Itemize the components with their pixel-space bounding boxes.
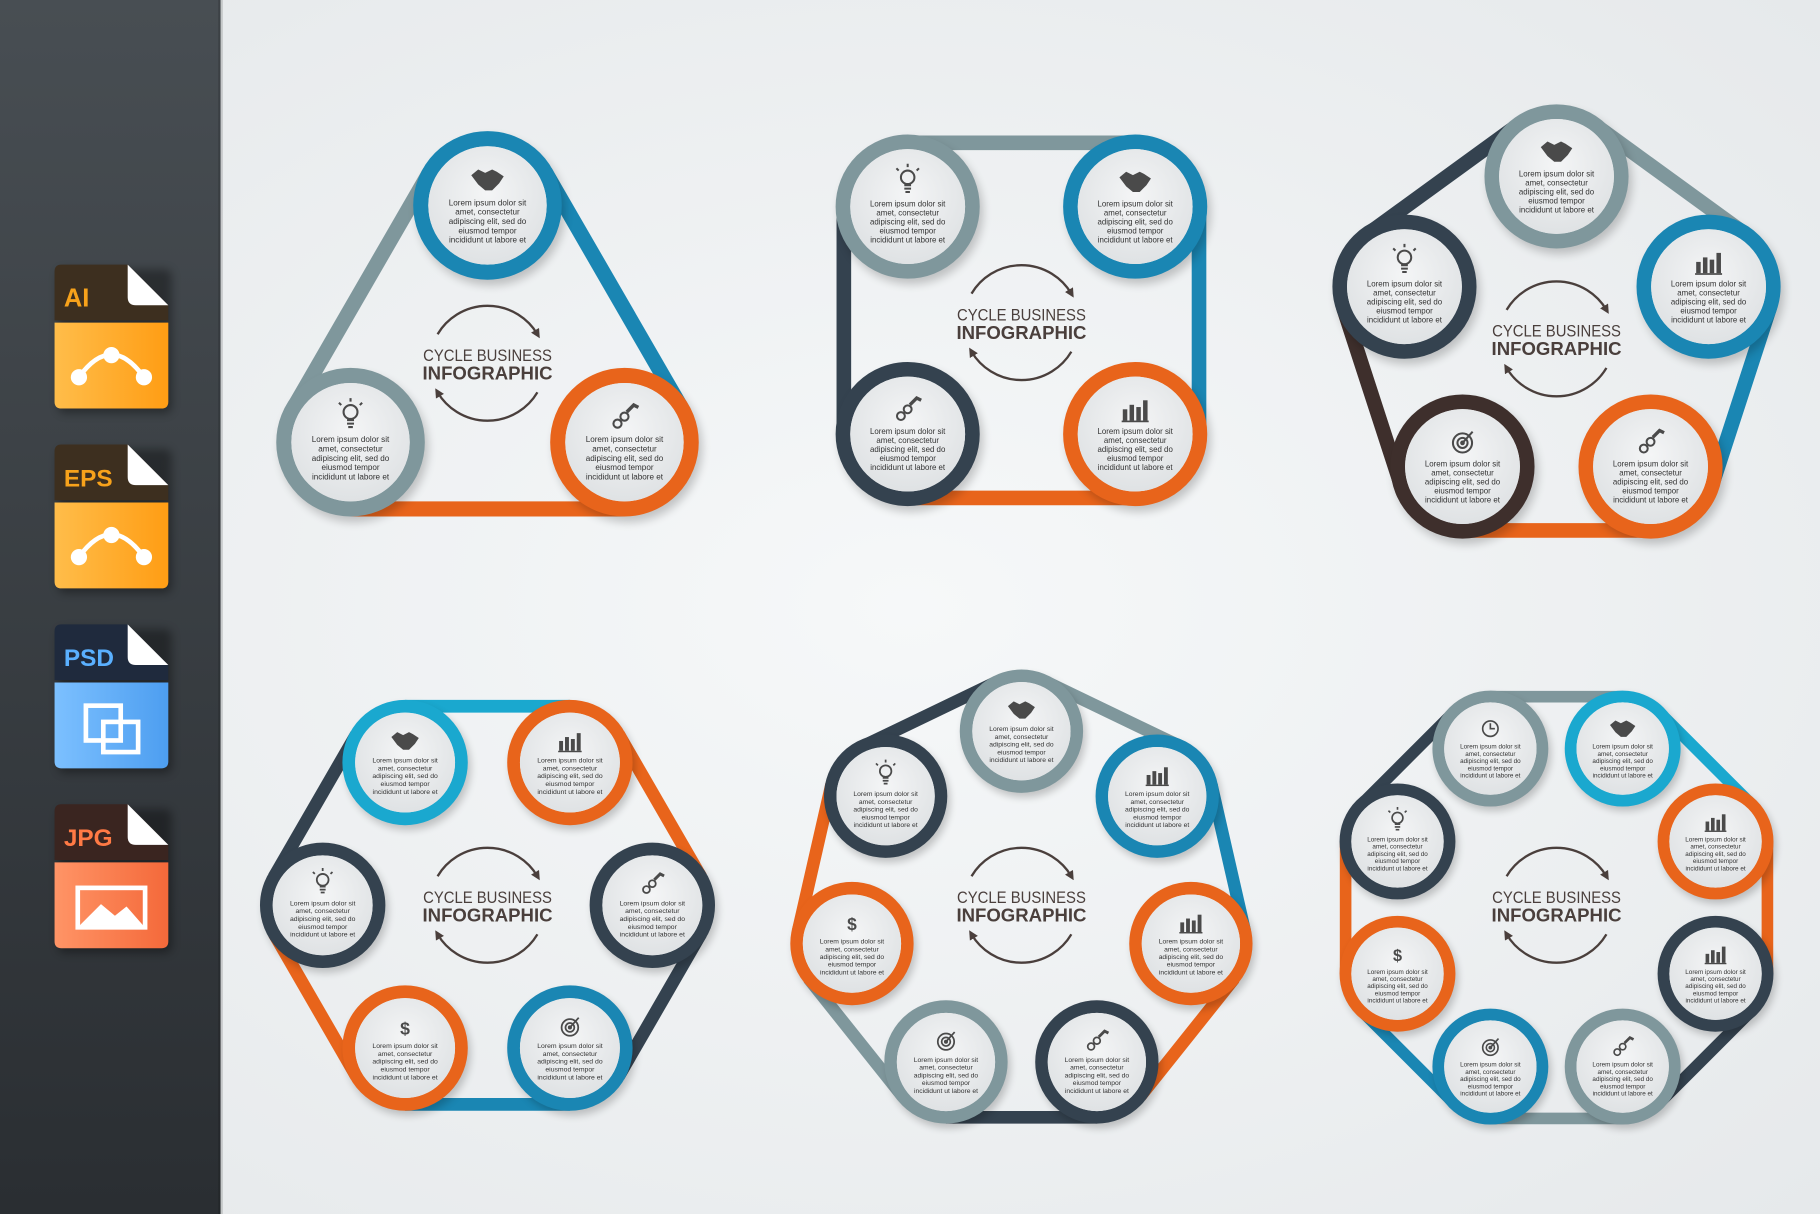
- diagram 3: pentagon: [1336, 110, 1784, 544]
- circle: bottom-right orange: amet, consectetur: [1619, 469, 1682, 478]
- circle: top-right blue: amet, consectetur: [1104, 209, 1167, 218]
- circle: left-lower orange: [1342, 920, 1458, 1036]
- ribbons: octagon: [1346, 697, 1767, 1118]
- circle: bottom-left orange: adipiscing elit, sed do: [372, 1059, 438, 1066]
- circle: upper-right blue: eiusmod tempor: [1133, 814, 1182, 821]
- circle: top blue: Lorem ipsum dolor sit: [449, 198, 527, 207]
- circle: top-right orange: [510, 705, 636, 830]
- circle: bottom-right orange: incididunt ut labore et: [1613, 496, 1689, 505]
- circle: right orange: incididunt ut labore et: [1159, 969, 1223, 976]
- circle: left slate: incididunt ut labore et: [1367, 316, 1443, 325]
- circle: bottom-right orange: eiusmod tempor: [1107, 454, 1164, 463]
- circle: left slate: amet, consectetur: [1373, 289, 1436, 298]
- circle: right orange: amet, consectetur: [1164, 946, 1218, 953]
- circle: right-upper orange: amet, consectetur: [1690, 844, 1741, 851]
- circle: upper-right blue: adipiscing elit, sed do: [1125, 807, 1190, 814]
- circle: bottom-right orange: [1582, 400, 1726, 544]
- circle: top-right blue: incididunt ut labore et: [1098, 236, 1173, 245]
- circle: left orange: adipiscing elit, sed do: [820, 954, 884, 961]
- circle: bottom-right blue: amet, consectetur: [543, 1051, 598, 1058]
- circle: bottom-left orange: amet, consectetur: [378, 1051, 433, 1058]
- center label: hexagon: CYCLE BUSINESS: [423, 889, 552, 907]
- circle: left-upper dark: eiusmod tempor: [1375, 858, 1420, 865]
- circle: bottom-left blue: eiusmod tempor: [1468, 1083, 1513, 1090]
- circle: top gray: incididunt ut labore et: [989, 757, 1054, 764]
- circle: top-right orange: eiusmod tempor: [545, 781, 595, 788]
- circle: left gray: [280, 374, 428, 522]
- circle: bottom-right dark: adipiscing elit, sed do: [1065, 1072, 1129, 1079]
- circle: top gray: amet, consectetur: [995, 734, 1049, 741]
- center label: triangle: INFOGRAPHIC: [423, 363, 552, 384]
- circle: left-lower orange: adipiscing elit, sed do: [1367, 983, 1428, 990]
- diagram 5: heptagon: [793, 674, 1255, 1128]
- circle: upper-right blue: amet, consectetur: [1130, 799, 1185, 806]
- circle: bottom-left gray: adipiscing elit, sed do: [914, 1072, 978, 1079]
- circle: top gray: [963, 674, 1086, 798]
- circle: left-lower orange: eiusmod tempor: [1375, 990, 1420, 997]
- circle: bottom-left orange: eiusmod tempor: [381, 1067, 430, 1074]
- center label: heptagon: CYCLE BUSINESS: [957, 889, 1086, 907]
- circle: top-right cyan: amet, consectetur: [1598, 751, 1648, 758]
- circle: top-right cyan: incididunt ut labore et: [1593, 773, 1653, 780]
- icon: EPS file: [55, 445, 172, 593]
- circle: right orange: Lorem ipsum dolor sit: [1159, 939, 1223, 946]
- circle: bottom-left blue: incididunt ut labore et: [1460, 1091, 1521, 1098]
- circle: left dark: [263, 847, 388, 973]
- circle: top gray: incididunt ut labore et: [1519, 205, 1595, 214]
- circle: left gray: amet, consectetur: [318, 444, 383, 453]
- center label: square: INFOGRAPHIC: [956, 322, 1086, 343]
- circle: top gray: Lorem ipsum dolor sit: [989, 726, 1054, 733]
- circle: right orange: amet, consectetur: [592, 444, 657, 453]
- circle: top-left gray: incididunt ut labore et: [1460, 773, 1521, 780]
- circle: top-left gray: Lorem ipsum dolor sit: [1460, 744, 1521, 751]
- circle: left slate: eiusmod tempor: [1376, 307, 1433, 316]
- circle: right dark: amet, consectetur: [625, 908, 680, 915]
- circle: top-right orange: amet, consectetur: [543, 765, 598, 772]
- circle: top-right cyan: adipiscing elit, sed do: [1592, 758, 1653, 765]
- circle: top-left gray: [839, 140, 983, 284]
- circle: upper-right blue: Lorem ipsum dolor sit: [1125, 791, 1190, 798]
- sidebar: [0, 0, 223, 1214]
- circle: right dark: adipiscing elit, sed do: [620, 916, 685, 923]
- center label: pentagon: CYCLE BUSINESS: [1492, 323, 1621, 341]
- circle: top-left gray: amet, consectetur: [1465, 751, 1516, 758]
- circle: right dark: [593, 847, 718, 973]
- circle: top-right blue: Lorem ipsum dolor sit: [1098, 200, 1174, 209]
- circle: top blue: [417, 137, 565, 286]
- circle: upper-left dark: eiusmod tempor: [861, 814, 911, 821]
- circle: bottom-right orange: incididunt ut labore et: [1098, 463, 1173, 472]
- circle: left slate: [1336, 220, 1480, 364]
- circle: top-right cyan: [1567, 695, 1683, 811]
- circle: top-right blue: [1066, 140, 1211, 284]
- circle: bottom-right gray: eiusmod tempor: [1600, 1083, 1645, 1090]
- circle: bottom-right gray: adipiscing elit, sed do: [1592, 1076, 1653, 1083]
- circle: right-lower dark: amet, consectetur: [1690, 976, 1741, 983]
- circle: top gray: eiusmod tempor: [1528, 196, 1585, 205]
- circle: left dark: amet, consectetur: [295, 908, 351, 915]
- circle: upper-right blue: [1098, 739, 1222, 863]
- icon: JPG file: [55, 804, 172, 953]
- circle: upper-right blue: incididunt ut labore et: [1125, 822, 1189, 829]
- circle: upper-left dark: incididunt ut labore et: [854, 822, 918, 829]
- circle: left dark: adipiscing elit, sed do: [290, 916, 356, 923]
- circle: right orange: Lorem ipsum dolor sit: [586, 435, 664, 444]
- circle: bottom-right dark: eiusmod tempor: [1073, 1080, 1122, 1087]
- circle: right orange: adipiscing elit, sed do: [1159, 954, 1223, 961]
- circle: left gray: adipiscing elit, sed do: [312, 454, 390, 463]
- circle: top-left cyan: [345, 705, 471, 830]
- circle: right blue: incididunt ut labore et: [1671, 316, 1747, 325]
- circle: right-upper orange: adipiscing elit, sed do: [1685, 851, 1746, 858]
- circle: right-upper orange: eiusmod tempor: [1693, 858, 1738, 865]
- center label: octagon: [1492, 848, 1622, 963]
- circle: bottom-left brown: eiusmod tempor: [1434, 487, 1491, 496]
- circle: left orange: amet, consectetur: [825, 946, 879, 953]
- icon: PSD file: PSD: [64, 645, 114, 672]
- circle: top gray: Lorem ipsum dolor sit: [1519, 169, 1595, 178]
- circle: left-upper dark: amet, consectetur: [1372, 844, 1423, 851]
- circle: bottom-left gray: incididunt ut labore et: [914, 1088, 978, 1095]
- ribbons: hexagon: [274, 706, 701, 1104]
- circle: top-left gray: amet, consectetur: [876, 209, 939, 218]
- circle: upper-left dark: [827, 739, 950, 863]
- circle: bottom-left brown: Lorem ipsum dolor sit: [1425, 460, 1501, 469]
- icon: AI file: [55, 265, 172, 413]
- circle: bottom-right blue: eiusmod tempor: [545, 1067, 595, 1074]
- circle: left-upper dark: Lorem ipsum dolor sit: [1367, 836, 1428, 843]
- circle: right orange: adipiscing elit, sed do: [586, 454, 664, 463]
- circle: upper-left dark: amet, consectetur: [859, 799, 913, 806]
- icon: AI file: AI: [64, 284, 89, 312]
- circle: top-right blue: adipiscing elit, sed do: [1098, 218, 1173, 227]
- circle: top-left gray: eiusmod tempor: [1468, 765, 1513, 772]
- circle: top-right orange: incididunt ut labore et: [537, 789, 603, 796]
- circle: left-lower orange: $: [1393, 947, 1402, 965]
- circle: right dark: eiusmod tempor: [628, 924, 678, 931]
- diagram 1: triangle: [280, 137, 702, 522]
- circle: bottom-right dark: [1038, 1005, 1161, 1128]
- circle: right-upper orange: [1660, 788, 1776, 904]
- circle: bottom-left dark: adipiscing elit, sed do: [870, 445, 946, 454]
- circle: right-lower dark: adipiscing elit, sed do: [1685, 983, 1746, 990]
- circle: right orange: eiusmod tempor: [1167, 962, 1216, 969]
- circle: left orange: $: [847, 914, 857, 934]
- circle: right orange: [1132, 887, 1255, 1010]
- circle: left gray: eiusmod tempor: [321, 463, 380, 472]
- circle: bottom-left dark: incididunt ut labore et: [870, 463, 946, 472]
- circle: left orange: Lorem ipsum dolor sit: [820, 939, 884, 946]
- circle: right dark: Lorem ipsum dolor sit: [620, 900, 685, 907]
- circle: left-upper dark: incididunt ut labore et: [1367, 865, 1428, 872]
- circle: bottom-right blue: adipiscing elit, sed do: [537, 1059, 603, 1066]
- circle: bottom-left blue: adipiscing elit, sed do: [1460, 1076, 1521, 1083]
- circle: top-left cyan: amet, consectetur: [378, 765, 433, 772]
- circle: top-left cyan: eiusmod tempor: [381, 781, 430, 788]
- circle: top-left gray: incididunt ut labore et: [870, 236, 946, 245]
- circle: top-left cyan: adipiscing elit, sed do: [372, 773, 438, 780]
- circle: bottom-right gray: amet, consectetur: [1598, 1069, 1648, 1076]
- circle: top blue: incididunt ut labore et: [449, 236, 527, 245]
- circle: bottom-left gray: Lorem ipsum dolor sit: [914, 1057, 978, 1064]
- diagram 4: hexagon: [263, 705, 718, 1116]
- circle: bottom-left blue: [1435, 1013, 1551, 1129]
- circle: bottom-right orange: [1066, 368, 1211, 512]
- circle: right blue: Lorem ipsum dolor sit: [1671, 280, 1747, 289]
- center label: heptagon: INFOGRAPHIC: [956, 905, 1086, 926]
- circle: left orange: eiusmod tempor: [828, 962, 877, 969]
- center label: hexagon: INFOGRAPHIC: [423, 905, 552, 926]
- circle: top blue: adipiscing elit, sed do: [449, 217, 527, 226]
- diagram 2: square: [839, 140, 1211, 512]
- circle: bottom-left orange: $: [400, 1018, 410, 1038]
- circle: bottom-right blue: incididunt ut labore et: [537, 1074, 603, 1081]
- circle: bottom-right orange: adipiscing elit, sed do: [1613, 478, 1689, 487]
- circle: bottom-left dark: eiusmod tempor: [879, 454, 936, 463]
- center label: square: [956, 265, 1086, 380]
- circle: left orange: [793, 887, 917, 1010]
- center label: pentagon: [1492, 281, 1622, 396]
- circle: right-lower dark: Lorem ipsum dolor sit: [1685, 969, 1746, 976]
- center label: triangle: CYCLE BUSINESS: [423, 347, 552, 365]
- circle: left slate: Lorem ipsum dolor sit: [1367, 280, 1443, 289]
- circle: top gray: amet, consectetur: [1525, 178, 1588, 187]
- circle: bottom-right gray: incididunt ut labore et: [1593, 1091, 1653, 1098]
- circle: left dark: incididunt ut labore et: [290, 932, 355, 939]
- circle: bottom-right gray: [1567, 1013, 1683, 1129]
- circle: bottom-right blue: [510, 990, 636, 1116]
- circle: left-upper dark: [1342, 788, 1458, 904]
- circle: right blue: eiusmod tempor: [1680, 307, 1737, 316]
- circle: left-lower orange: incididunt ut labore et: [1367, 998, 1428, 1005]
- circle: bottom-right dark: incididunt ut labore et: [1065, 1088, 1129, 1095]
- icon: PSD file: [55, 624, 172, 773]
- circle: bottom-left brown: amet, consectetur: [1431, 469, 1494, 478]
- circle: top-left gray: eiusmod tempor: [879, 227, 936, 236]
- center label: pentagon: INFOGRAPHIC: [1492, 338, 1622, 359]
- circle: bottom-left dark: [839, 368, 983, 512]
- circle: bottom-right orange: eiusmod tempor: [1622, 487, 1679, 496]
- circle: bottom-left orange: incididunt ut labore et: [373, 1074, 438, 1081]
- circle: bottom-left orange: [345, 990, 471, 1116]
- circle: upper-left dark: adipiscing elit, sed do: [853, 807, 918, 814]
- circle: top-right cyan: Lorem ipsum dolor sit: [1592, 744, 1653, 751]
- circle: top-left gray: adipiscing elit, sed do: [870, 218, 946, 227]
- center label: hexagon: [422, 848, 552, 963]
- circle: top gray: adipiscing elit, sed do: [989, 742, 1054, 749]
- ribbons: heptagon: [798, 681, 1245, 1117]
- circle: right blue: adipiscing elit, sed do: [1671, 298, 1747, 307]
- circle: left-upper dark: adipiscing elit, sed do: [1367, 851, 1428, 858]
- center label: heptagon: [956, 848, 1086, 963]
- circle: bottom-left gray: [887, 1005, 1011, 1128]
- circle: bottom-right orange: Lorem ipsum dolor sit: [1613, 460, 1689, 469]
- circle: bottom-left brown: adipiscing elit, sed do: [1425, 478, 1501, 487]
- circle: bottom-left gray: eiusmod tempor: [922, 1080, 971, 1087]
- circle: top-right cyan: eiusmod tempor: [1600, 765, 1645, 772]
- circle: right blue: [1640, 220, 1784, 364]
- circle: top-left gray: Lorem ipsum dolor sit: [870, 200, 946, 209]
- circle: top blue: amet, consectetur: [455, 208, 520, 217]
- circle: right-lower dark: [1660, 920, 1776, 1036]
- circle: right orange: [554, 374, 702, 522]
- circle: right orange: eiusmod tempor: [595, 463, 654, 472]
- circle: bottom-left blue: amet, consectetur: [1465, 1069, 1516, 1076]
- circle: bottom-right gray: Lorem ipsum dolor sit: [1592, 1062, 1653, 1069]
- circle: bottom-right blue: Lorem ipsum dolor sit: [537, 1043, 603, 1050]
- ribbons: pentagon: [1343, 125, 1770, 530]
- circle: bottom-right orange: amet, consectetur: [1104, 436, 1167, 445]
- circle: right orange: incididunt ut labore et: [586, 472, 664, 481]
- circle: left dark: Lorem ipsum dolor sit: [290, 900, 355, 907]
- circle: right-upper orange: incididunt ut labore et: [1685, 865, 1746, 872]
- circle: left-lower orange: Lorem ipsum dolor sit: [1367, 969, 1428, 976]
- center label: octagon: CYCLE BUSINESS: [1492, 889, 1621, 907]
- circle: top gray: [1488, 110, 1632, 254]
- circle: top gray: adipiscing elit, sed do: [1519, 187, 1595, 196]
- circle: bottom-left dark: Lorem ipsum dolor sit: [870, 427, 946, 436]
- icon: JPG file: JPG: [64, 825, 113, 852]
- circle: right blue: amet, consectetur: [1677, 289, 1740, 298]
- circle: top-left cyan: incididunt ut labore et: [373, 789, 438, 796]
- circle: top blue: eiusmod tempor: [458, 226, 517, 235]
- circle: left gray: incididunt ut labore et: [312, 472, 390, 481]
- icon: EPS file: EPS: [64, 465, 113, 492]
- circle: top-right orange: adipiscing elit, sed do: [537, 773, 603, 780]
- circle: upper-left dark: Lorem ipsum dolor sit: [853, 791, 918, 798]
- circle: top gray: eiusmod tempor: [997, 749, 1046, 756]
- circle: bottom-left dark: amet, consectetur: [876, 436, 939, 445]
- circle: left gray: Lorem ipsum dolor sit: [312, 435, 390, 444]
- circle: right-upper orange: Lorem ipsum dolor sit: [1685, 836, 1746, 843]
- circle: bottom-left brown: incididunt ut labore et: [1425, 496, 1501, 505]
- ribbons: triangle: [293, 172, 682, 509]
- center label: triangle: [422, 306, 552, 421]
- circle: bottom-right orange: Lorem ipsum dolor sit: [1098, 427, 1174, 436]
- circle: top-left gray: [1435, 695, 1551, 811]
- circle: left dark: eiusmod tempor: [298, 924, 348, 931]
- diagram 6: octagon: [1342, 695, 1776, 1129]
- circle: top-left cyan: Lorem ipsum dolor sit: [372, 758, 438, 765]
- center label: octagon: INFOGRAPHIC: [1492, 905, 1622, 926]
- circle: right-lower dark: incididunt ut labore et: [1685, 998, 1746, 1005]
- circle: bottom-right dark: amet, consectetur: [1070, 1065, 1124, 1072]
- circle: bottom-left brown: [1394, 400, 1538, 544]
- circle: left-lower orange: amet, consectetur: [1372, 976, 1423, 983]
- circle: top-right blue: eiusmod tempor: [1107, 227, 1164, 236]
- circle: top-right orange: Lorem ipsum dolor sit: [537, 758, 603, 765]
- circle: right-lower dark: eiusmod tempor: [1693, 990, 1738, 997]
- circle: bottom-right orange: adipiscing elit, sed do: [1098, 445, 1173, 454]
- circle: bottom-left orange: Lorem ipsum dolor sit: [372, 1043, 438, 1050]
- center label: square: CYCLE BUSINESS: [957, 306, 1086, 324]
- circle: left slate: adipiscing elit, sed do: [1367, 298, 1443, 307]
- circle: right dark: incididunt ut labore et: [620, 932, 685, 939]
- circle: bottom-right dark: Lorem ipsum dolor sit: [1065, 1057, 1129, 1064]
- ribbons: square: [844, 143, 1199, 498]
- circle: left orange: incididunt ut labore et: [820, 969, 884, 976]
- circle: bottom-left gray: amet, consectetur: [919, 1065, 974, 1072]
- circle: bottom-left blue: Lorem ipsum dolor sit: [1460, 1062, 1521, 1069]
- circle: top-left gray: adipiscing elit, sed do: [1460, 758, 1521, 765]
